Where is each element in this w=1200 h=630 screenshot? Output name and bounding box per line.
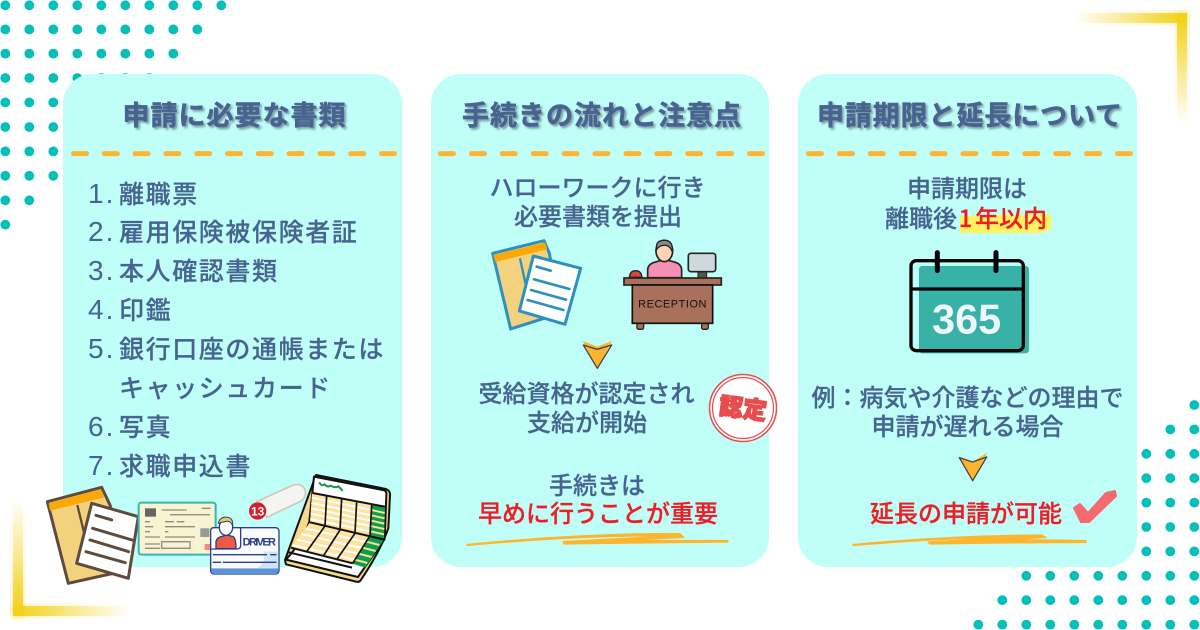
text: act early: 早めに行うことが重要 [478, 494, 718, 529]
list: required documents: 求職申込書 [119, 447, 252, 483]
icon: calendar 365: 365 [932, 296, 1001, 342]
list: required documents: 2. [88, 216, 115, 247]
heading: deadline and extension: 申請期限と延長について [817, 101, 1123, 131]
icon: stamp seal [249, 485, 306, 520]
text: within one year: 1 [959, 199, 972, 234]
icon: envelope and blue paper [493, 241, 581, 329]
underline brush stroke [467, 533, 728, 546]
list: required documents: 雇用保険被保険者証 [119, 213, 358, 249]
icon: reception desk [624, 240, 721, 329]
list: required documents: 7. [88, 450, 115, 481]
icon: insurance card [139, 503, 216, 555]
decorative yellow corner: bottom left [13, 500, 128, 616]
panel: required documents [63, 74, 402, 567]
dot pattern: bottom right [973, 400, 1199, 629]
panel: procedure flow [431, 74, 769, 567]
decorative yellow corner: top right [1075, 13, 1187, 123]
list: required documents: キャッシュカード [119, 369, 332, 405]
icon: reception desk: RECEPTION [638, 299, 707, 311]
list: required documents: 5. [88, 333, 115, 364]
text: application deadline: 申請期限は [907, 169, 1027, 204]
text: submit at Hello Work [490, 168, 706, 232]
list: required documents: 1. [88, 178, 115, 209]
list: required documents: 印鑑 [119, 291, 172, 327]
icon: driver license [211, 517, 279, 574]
panel: deadline and extension [798, 74, 1137, 567]
text: example of delay reasons: 申請が遅れる場合 [872, 407, 1064, 442]
text: eligibility certified [478, 374, 694, 438]
list: required documents: 写真 [119, 408, 172, 444]
text: eligibility certified: 支給が開始 [527, 403, 647, 438]
icon: envelope and brown paper [47, 487, 138, 583]
icon: bankbook [285, 475, 390, 582]
list: required documents: 銀行口座の通帳または [119, 330, 385, 366]
text: application deadline [885, 169, 1052, 234]
text: application deadline: 離職後 [885, 199, 957, 234]
text: act early: 手続きは [549, 466, 645, 501]
list: required documents [88, 175, 385, 483]
underline brush stroke [853, 535, 1086, 546]
icon: stamp seal: 13 [251, 504, 265, 518]
text: submit at Hello Work: ハローワークに行き [490, 168, 706, 203]
heading: required documents: 申請に必要な書類 [122, 101, 346, 131]
dot pattern: top left [0, 0, 226, 230]
icon: check mark [1074, 491, 1116, 522]
text: example of delay reasons [812, 378, 1124, 442]
arrow: panel 3 down [959, 453, 987, 482]
list: required documents: 本人確認書類 [119, 252, 279, 288]
list: required documents: 4. [88, 294, 115, 325]
icon: calendar 365 [911, 253, 1029, 353]
icon: driver license: DRIVER [243, 536, 276, 548]
list: required documents: 6. [88, 411, 115, 442]
text: submit at Hello Work: 必要書類を提出 [514, 197, 682, 232]
text: act early [478, 466, 718, 529]
highlight: yellow marker [960, 214, 1052, 233]
text: extension possible: 延長の申請が可能 [870, 494, 1062, 529]
heading: procedure flow: 手続きの流れと注意点 [462, 101, 742, 131]
text: example of delay reasons: 例：病気や介護などの理由で [812, 378, 1124, 413]
text: eligibility certified: 受給資格が認定され [478, 374, 694, 409]
list: required documents: 離職票 [119, 175, 199, 211]
stamp: certified: 認定 [717, 386, 769, 427]
list: required documents: 3. [88, 255, 115, 286]
stamp: certified [710, 374, 776, 442]
arrow: panel 2 down [583, 341, 612, 369]
text: within one year: 年以内 [975, 199, 1047, 234]
